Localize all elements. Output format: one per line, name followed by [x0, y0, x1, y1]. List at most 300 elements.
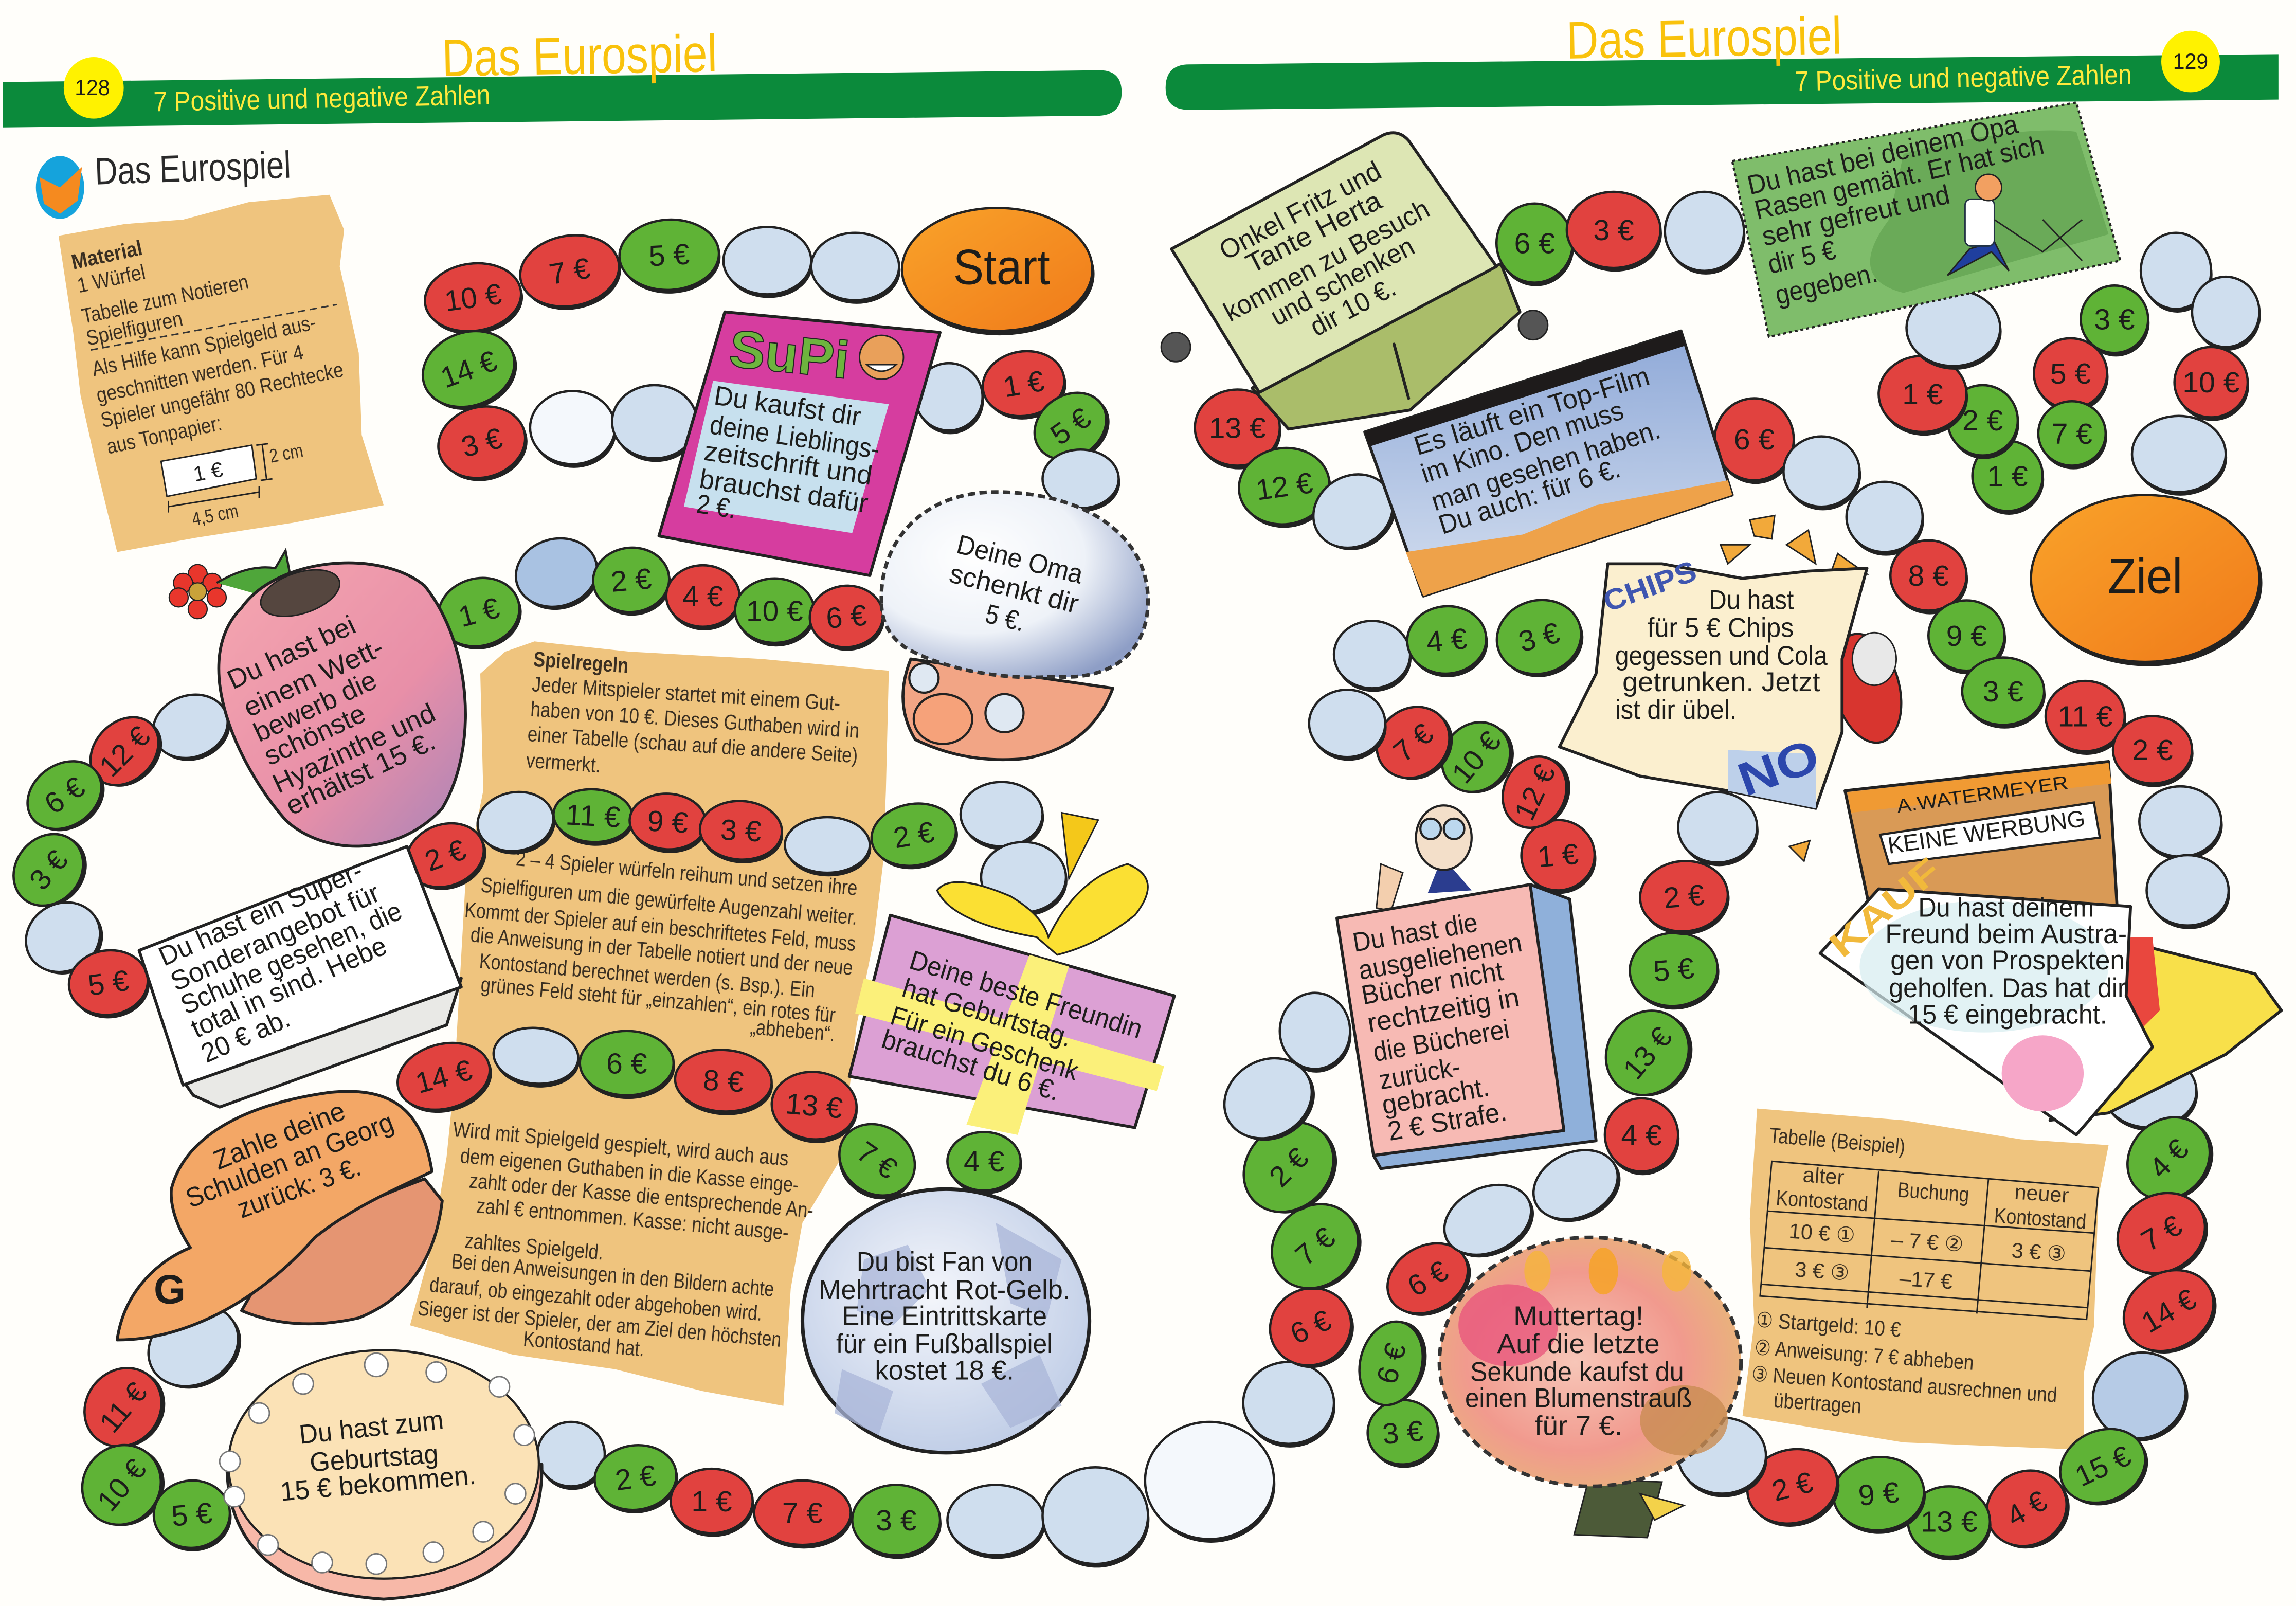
stone 7 €: [823, 1110, 930, 1214]
start field: [902, 208, 1095, 335]
empty stone: [1678, 1418, 1767, 1497]
cap text: Zahle deine: [209, 1095, 350, 1176]
bag lettering CHIPS: CHIPS: [1599, 554, 1701, 619]
stone 6 €: 6 €: [825, 599, 868, 635]
cake top: [228, 1350, 539, 1579]
apple text: erhältst 15 €.: [281, 726, 440, 821]
stone 4 €: [947, 1132, 1022, 1194]
stone 7 €: [514, 227, 627, 318]
empty stone: [1309, 690, 1387, 761]
bow: [937, 864, 1148, 955]
stone 5 €: [1022, 378, 1123, 476]
flyer text: Du hast deinem: [1918, 893, 2094, 923]
stone 1 €: [430, 569, 530, 659]
stone 2 €: [866, 797, 963, 876]
illustration: flyer and mailbox: KAUF: [1822, 851, 1948, 965]
cake side: [227, 1465, 542, 1599]
bouquet text: Sekunde kaufst du: [1470, 1357, 1684, 1387]
empty stone: [724, 227, 812, 298]
book text: rechtzeitig in: [1365, 982, 1522, 1038]
magazine cover: [659, 312, 940, 575]
stone 6 €: 6 €: [1402, 1254, 1454, 1303]
ball text: Eine Eintrittskarte: [842, 1301, 1047, 1331]
empty stone: [1522, 1136, 1632, 1236]
grandma text: [946, 529, 1087, 638]
start field: Start: [953, 239, 1050, 295]
stone 4 €: [666, 565, 741, 630]
stone 1 €: 1 €: [455, 591, 503, 634]
apple text: Du hast bei: [223, 610, 360, 695]
cinema text: [1411, 361, 1664, 540]
bouquet text: einen Blumenstrauß: [1465, 1383, 1692, 1414]
stone 5 €: 5 €: [1652, 952, 1695, 988]
stone 4 €: 4 €: [1621, 1119, 1662, 1152]
empty stone: [13, 888, 116, 988]
stone 11 €: [68, 1351, 181, 1465]
rules text: [417, 647, 860, 1361]
ball text: kostet 18 €.: [875, 1355, 1014, 1385]
grandma text: schenkt dir: [946, 558, 1081, 619]
chips text: für 5 € Chips: [1648, 613, 1794, 643]
empty stone: [915, 363, 984, 434]
rules text: Kontostand berechnet werden (s. Bsp.). Ein: [478, 949, 816, 1002]
empty stone: [537, 1422, 606, 1490]
stone 7 €: 7 €: [1289, 1221, 1342, 1272]
stone 7 €: 7 €: [547, 251, 592, 291]
illustration: birthday cake: [220, 1350, 542, 1599]
stone 3 €: [0, 819, 101, 922]
stone 6 €: [14, 747, 118, 846]
empty stone: [2147, 855, 2230, 929]
example table: Kontostand: [1994, 1203, 2087, 1234]
rules text: die Anweisung in der Tabelle notiert und der neue: [469, 923, 854, 980]
flyer text: [1885, 893, 2127, 1030]
empty stone: [1210, 1042, 1329, 1157]
page number 129: [2161, 31, 2220, 92]
example table: –17 €: [1899, 1267, 1954, 1294]
cap text: Schulden an Georg: [182, 1107, 397, 1214]
panel: Tabelle Beispiel: [1743, 1109, 2109, 1450]
illustration: shoe box: [139, 846, 461, 1107]
cinema text: im Kino. Den muss: [1417, 395, 1627, 489]
stone 11 €: 11 €: [2058, 700, 2112, 733]
page title right: Das Eurospiel: [1566, 6, 1842, 70]
illustration: grandma: [881, 492, 1148, 760]
stone 8 €: [673, 1048, 775, 1117]
stone 4 €: 4 €: [2001, 1484, 2053, 1533]
man: [1377, 805, 1472, 911]
stone 3 €: [852, 1485, 942, 1559]
cola can: [1821, 626, 1912, 750]
cake text: Du hast zum: [298, 1405, 445, 1450]
stone 2 €: 2 €: [1662, 878, 1706, 915]
stone 5 €: 5 €: [648, 238, 691, 273]
stone 12 €: [77, 702, 176, 801]
stone 4 €: 4 €: [2143, 1133, 2195, 1185]
book text: die Bücherei: [1371, 1014, 1512, 1068]
stone 4 €: 4 €: [964, 1145, 1004, 1178]
stone 5 €: [65, 945, 154, 1024]
stone 2 €: 2 €: [891, 816, 937, 855]
chips crumbs: [1721, 515, 1867, 861]
game path: left page stones: [0, 208, 1149, 1567]
stone 10 €: [66, 1428, 181, 1543]
chapter label right: 7 Positive und negative Zahlen: [1795, 59, 2132, 97]
stone 10 €: [735, 579, 816, 646]
stone 3 €: 3 €: [2094, 303, 2135, 336]
empty stone: [1280, 993, 1351, 1073]
stone 5 €: [151, 1477, 234, 1555]
empty stone: [2081, 1339, 2200, 1455]
lawn text: gegeben.: [1772, 258, 1881, 311]
stone 10 €: 10 €: [443, 278, 503, 318]
empty stone: [1300, 459, 1409, 565]
panel background: [59, 195, 384, 552]
stone 11 €: 11 €: [565, 798, 621, 834]
finish field: [2031, 495, 2263, 666]
empty stone: [1042, 1467, 1149, 1567]
material text: geschnitten werden. Für 4: [94, 340, 305, 407]
stone 12 €: [1234, 442, 1336, 534]
ribbons: [855, 978, 1164, 1091]
bag blue corner: [1728, 750, 1816, 808]
stone 6 €: [1496, 204, 1574, 286]
magazine text: deine Lieblings-: [708, 409, 882, 465]
stone 13 €: 13 €: [1209, 411, 1266, 444]
stone 1 €: [1973, 441, 2044, 515]
rules text: zahlt oder der Kasse die entsprechende An-: [468, 1169, 815, 1222]
stone 5 €: [1626, 929, 1723, 1014]
bouquet text: für 7 €.: [1534, 1411, 1622, 1441]
stone 5 €: 5 €: [170, 1496, 213, 1533]
illustration: apple: [169, 551, 465, 846]
cap: [117, 1091, 432, 1340]
rules text: zahltes Spielgeld.: [464, 1229, 604, 1265]
cake text: 15 € bekommen.: [279, 1460, 477, 1507]
stone 7 €: [1255, 1186, 1379, 1308]
panel: Spielregeln: [410, 641, 889, 1406]
money slip diagram: [161, 439, 305, 530]
stone 1 €: 1 €: [1001, 365, 1046, 404]
apple text: schönste: [259, 698, 370, 771]
stone 2 €: [2113, 716, 2194, 787]
table footnotes: übertragen: [1773, 1388, 1862, 1418]
table footnotes: ③ Neuen Kontostand ausrechnen und: [1751, 1362, 2058, 1407]
suitcase text: Tante Herta: [1241, 185, 1387, 279]
empty stone: [2192, 277, 2261, 351]
stone 6 €: 6 €: [1286, 1304, 1336, 1351]
stone 4 €: [1404, 603, 1491, 680]
stone 6 €: [807, 583, 887, 654]
stone 7 €: 7 €: [1387, 717, 1439, 768]
rules text: vermerkt.: [526, 748, 602, 777]
material text: [69, 236, 346, 459]
stone 9 €: 9 €: [646, 804, 689, 839]
money slip diagram: 2 cm: [267, 439, 305, 467]
top band: [1365, 331, 1686, 447]
mailbox name: A.WATERMEYER: [1895, 771, 2069, 817]
lawn text: sehr gefreut und: [1759, 179, 1953, 252]
stone 3 €: 3 €: [1983, 675, 2023, 708]
book cover: [1337, 885, 1564, 1156]
page number 128: [64, 57, 124, 119]
empty stone: [491, 1024, 582, 1091]
stone 7 €: 7 €: [782, 1497, 823, 1530]
stone 14 €: [390, 1033, 500, 1123]
gift text: brauchst du 6 €.: [878, 1024, 1063, 1107]
stone 11 €: 11 €: [93, 1376, 154, 1439]
stone 3 €: [430, 396, 536, 491]
stone 2 €: 2 €: [609, 562, 653, 599]
apple text: einem Wett-: [239, 632, 388, 723]
flyer text: Freund beim Austra-: [1885, 919, 2127, 949]
stone 6 €: 6 €: [39, 770, 91, 821]
header: right page: [1166, 6, 2279, 110]
stone 6 €: 6 €: [1370, 1340, 1413, 1387]
stone 8 €: 8 €: [1908, 560, 1949, 592]
header: left page: [3, 24, 1122, 128]
flyer: [1820, 889, 2153, 1135]
magazine text: [695, 380, 882, 525]
empty stone: [1243, 1362, 1335, 1448]
example table: [1760, 1161, 2099, 1320]
chips text: gegessen und Cola: [1615, 641, 1828, 671]
hair: [881, 492, 1148, 677]
material text: Tabelle zum Notieren: [80, 269, 250, 328]
stone 11 €: [552, 787, 636, 848]
stone 3 €: [1365, 1397, 1442, 1471]
table footnotes: [1751, 1308, 2058, 1418]
flyer watercolor: [2002, 1035, 2084, 1111]
book text: [1350, 907, 1524, 1147]
empty stone: [530, 391, 617, 468]
stone 2 €: 2 €: [1768, 1466, 1816, 1508]
stone 2 €: [1225, 1103, 1355, 1233]
green header bar right: [1166, 54, 2279, 110]
stone 3 €: 3 €: [876, 1504, 916, 1537]
game path: right page stones: [1145, 192, 2263, 1564]
stone 2 €: 2 €: [421, 833, 470, 878]
illustration: boy with cap: [117, 1091, 442, 1340]
stone 6 €: [1350, 1313, 1436, 1413]
stone 10 €: [421, 257, 528, 341]
example table: Kontostand: [1775, 1186, 1869, 1216]
stone 1 €: [1878, 356, 1968, 436]
money slip diagram: 1 €: [191, 457, 225, 486]
face: [242, 1179, 442, 1324]
blossom: [1439, 1237, 1741, 1486]
stone 2 €: 2 €: [613, 1459, 658, 1497]
boy mowing: [1947, 174, 2082, 275]
material text: aus Tonpapier:: [104, 411, 224, 459]
box lid: [139, 846, 461, 1085]
book text: Du hast die: [1350, 907, 1480, 958]
illustration: library book and man: [1337, 805, 1596, 1168]
stone 13 €: [1908, 1486, 1992, 1560]
example table: alter: [1802, 1163, 1845, 1189]
stone 4 €: [2111, 1099, 2230, 1219]
stone 7 €: [1362, 691, 1467, 796]
large white stone at spine: [1145, 1422, 1275, 1543]
stone 1 €: [978, 345, 1072, 426]
panel background: [1743, 1109, 2109, 1450]
stone 6 €: 6 €: [606, 1047, 647, 1080]
stone 4 €: [1973, 1455, 2084, 1564]
stone 2 €: 2 €: [2132, 734, 2173, 767]
mailbox: [1845, 762, 2119, 945]
empty stone: [811, 233, 900, 304]
stone 6 €: [1375, 1229, 1484, 1331]
stone 3 €: [1567, 192, 1662, 272]
stone 10 €: [2175, 347, 2249, 421]
flyer text: gen von Prospekten: [1890, 945, 2125, 976]
magazine text: 2 €.: [695, 489, 738, 525]
stone 3 €: 3 €: [23, 844, 75, 896]
example table: 10 € ①: [1788, 1219, 1856, 1247]
stone 9 €: [1928, 601, 2006, 674]
stem and leaf: [216, 551, 300, 603]
stone 4 €: [1605, 1098, 1679, 1175]
stone 3 €: 3 €: [1593, 214, 1634, 247]
stone 14 €: 14 €: [437, 344, 501, 395]
stone 3 €: 3 €: [1381, 1415, 1424, 1451]
stone 1 €: 1 €: [691, 1485, 732, 1518]
stone 13 €: 13 €: [1617, 1021, 1678, 1086]
bag: [1560, 564, 1867, 808]
stone 13 €: 13 €: [1921, 1506, 1978, 1539]
stone 3 €: 3 €: [1515, 616, 1563, 659]
stone 13 €: [769, 1069, 861, 1147]
lawn text: [1744, 109, 2047, 311]
panel background: [410, 641, 889, 1406]
glasses: [909, 663, 1023, 732]
illustration: suitcase: [1161, 133, 1548, 429]
empty stone: [1042, 449, 1120, 512]
stone 12 €: [1491, 745, 1582, 840]
empty stone: [1433, 1171, 1545, 1272]
stone 2 €: [590, 1440, 682, 1519]
stone 6 €: 6 €: [1514, 227, 1555, 260]
stone 15 €: [2048, 1415, 2160, 1520]
box: [849, 915, 1174, 1128]
illustration: soccer ball: [802, 1189, 1090, 1453]
stone 9 €: [628, 792, 709, 855]
cake text: Geburtstag: [309, 1439, 439, 1478]
icon: grinning face: [860, 335, 903, 380]
empty stone: [947, 1485, 1045, 1559]
apple text: [223, 610, 440, 821]
stone 5 €: 5 €: [1044, 402, 1097, 452]
stone 4 €: 4 €: [682, 580, 723, 613]
rules text: haben von 10 €. Dieses Guthaben wird in: [530, 697, 860, 743]
stone 2 €: [590, 545, 674, 619]
stone 13 €: [1589, 993, 1710, 1114]
flower: [169, 565, 226, 619]
empty stone: [1665, 192, 1745, 275]
stone 1 €: [1518, 817, 1599, 897]
stone 8 €: [1890, 540, 1968, 615]
empty stone: [612, 385, 698, 462]
empty stone: [2141, 233, 2213, 313]
rules text: Spielfiguren um die gewürfelte Augenzahl weiter.: [480, 873, 858, 929]
empty stone: [134, 1289, 256, 1405]
stone 9 €: [1830, 1453, 1929, 1538]
stone 7 €: [2103, 1177, 2223, 1292]
green header bar left: [3, 70, 1122, 128]
stone 14 €: [412, 318, 528, 423]
chips text: Du hast: [1709, 585, 1794, 616]
table footnotes: ② Anweisung: 7 € abheben: [1754, 1336, 1975, 1375]
suitcase text: dir 10 €.: [1305, 272, 1401, 342]
stone 5 €: 5 €: [2050, 357, 2091, 390]
book text: Bücher nicht: [1359, 956, 1506, 1010]
suitcase text: Onkel Fritz und: [1214, 155, 1386, 266]
apple body: [219, 563, 465, 846]
cap letter G: G: [154, 1266, 186, 1312]
magazine text: Du kaufst dir: [712, 380, 863, 432]
empty stone: [785, 817, 871, 876]
book pages: [1373, 885, 1596, 1168]
stone 3 €: 3 €: [720, 814, 762, 849]
empty stone: [1334, 621, 1412, 692]
rules text: Kontostand hat.: [522, 1327, 645, 1361]
material text: Material: [69, 236, 144, 274]
no advertising sign: KEINE WERBUNG: [1886, 805, 2087, 859]
money slip diagram: 4,5 cm: [190, 500, 240, 530]
chips text: getrunken. Jetzt: [1622, 667, 1820, 697]
lawn text: Rasen gemäht. Er hat sich: [1752, 130, 2047, 226]
wheels: [1161, 311, 1548, 362]
apple text: bewerb die: [249, 665, 381, 748]
icing dots: [220, 1353, 534, 1574]
empty stone: [981, 842, 1068, 916]
example table: – 7 € ②: [1891, 1228, 1964, 1256]
ball text: [819, 1247, 1071, 1385]
ball patches: [835, 1223, 1061, 1435]
stone 2 €: [1637, 857, 1732, 939]
nose: [914, 694, 972, 744]
stone 6 €: [580, 1031, 675, 1099]
gift text: Für ein Geschenk: [887, 1001, 1082, 1087]
flyer text: geholfen. Das hat dir: [1889, 973, 2126, 1003]
suitcase text: und schenken: [1265, 231, 1419, 332]
stone 6 €: [1257, 1274, 1367, 1382]
empty stone: [1907, 290, 2002, 370]
empty stone: [2139, 786, 2223, 860]
stone 10 €: [1428, 707, 1528, 808]
stone 3 €: [1962, 658, 2046, 729]
illustration: chips bag and cola can: [1560, 515, 1912, 861]
stone 11 €: [2046, 681, 2126, 755]
poster frame: [1365, 331, 1732, 596]
book text: ausgeliehenen: [1356, 927, 1524, 986]
bouquet stems: [1574, 1479, 1662, 1538]
stone 3 €: [698, 799, 785, 865]
heading: Das Eurospiel with book icon: [36, 143, 292, 219]
illustration: flower bouquet: [1439, 1237, 1741, 1538]
stone 2 €: [397, 813, 495, 901]
stone 13 €: [1195, 389, 1281, 470]
stone 7 €: [754, 1481, 852, 1548]
illustration: gift: [849, 813, 1174, 1135]
bouquet text: Muttertag!: [1513, 1301, 1643, 1331]
cinema text: Du auch: für 6 €.: [1435, 453, 1624, 540]
stone 9 €: 9 €: [1857, 1476, 1901, 1512]
illustration: cinema poster: [1365, 331, 1732, 596]
bag lettering NO: NO: [1731, 729, 1826, 806]
ball text: Mehrtracht Rot-Gelb.: [819, 1275, 1071, 1305]
rules text: Spielregeln: [533, 647, 629, 678]
